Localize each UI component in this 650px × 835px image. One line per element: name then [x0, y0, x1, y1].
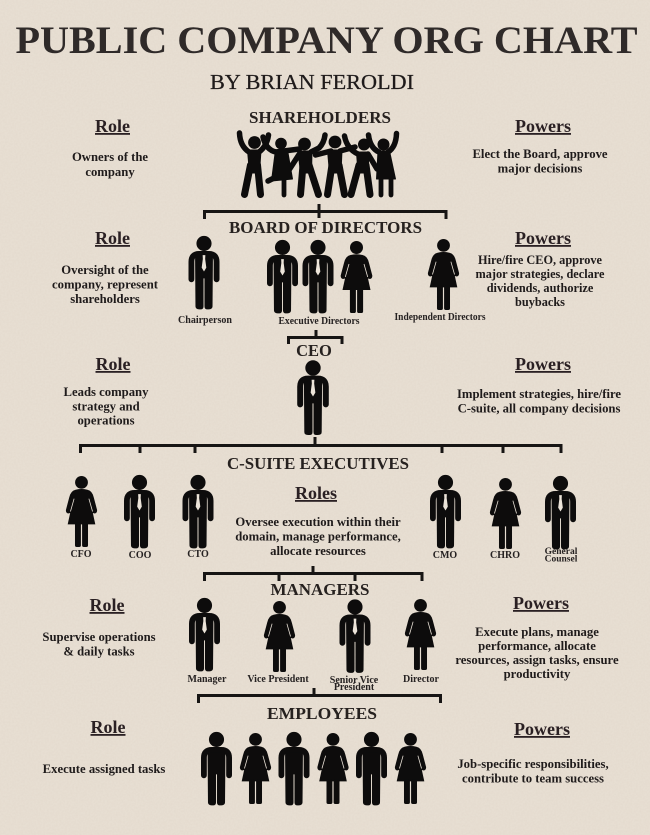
- label: chairperson: Chairperson: [178, 315, 232, 326]
- right powers description: Hire/fire CEO, approve: [478, 253, 602, 267]
- icon: employee: [395, 733, 426, 804]
- right powers description: resources, assign tasks, ensure: [455, 653, 619, 667]
- roles description: Oversee execution within their: [235, 515, 401, 529]
- connector: shareholders to board: [204, 204, 446, 219]
- connector: CEO to C-suite: [80, 437, 561, 453]
- label: General Counsel: General: [545, 547, 577, 557]
- left role description: operations: [77, 414, 135, 428]
- left role description: Oversight of the: [61, 263, 149, 277]
- right powers description: productivity: [504, 667, 571, 681]
- right powers label: Powers: [515, 354, 571, 374]
- label: director: Director: [403, 674, 440, 685]
- right powers description: buybacks: [515, 295, 565, 309]
- icon: CEO figure: [300, 360, 326, 435]
- label: COO: COO: [129, 550, 152, 561]
- right powers label: Powers: [515, 228, 571, 248]
- icon: employee: [281, 732, 307, 805]
- roles label: Roles: [295, 483, 337, 503]
- right powers description: C-suite, all company decisions: [458, 402, 620, 416]
- icon: CFO: [66, 476, 97, 547]
- label: vice president: Vice President: [247, 674, 309, 685]
- right powers description: contribute to team success: [462, 772, 604, 786]
- panel: C-suite executives: [66, 454, 578, 564]
- label: senior vice president: President: [334, 682, 375, 693]
- panel: managers: [42, 580, 619, 693]
- right powers description: Execute plans, manage: [475, 625, 599, 639]
- icon: employee: [359, 732, 384, 805]
- panel: board of directors: [52, 218, 605, 327]
- icon: CTO: [185, 475, 211, 548]
- icon: employee: [317, 733, 349, 804]
- label: independent directors: Independent Directors: [394, 312, 486, 323]
- left role description: shareholders: [70, 292, 140, 306]
- label: manager: Manager: [188, 674, 227, 685]
- heading: board of directors: BOARD OF DIRECTORS: [229, 218, 422, 237]
- right powers label: Powers: [515, 116, 571, 136]
- icon: CHRO: [490, 478, 521, 549]
- panel: employees: [43, 704, 609, 805]
- right powers label: Powers: [513, 593, 569, 613]
- roles description: allocate resources: [270, 544, 366, 558]
- subtitle: byline: BY BRIAN FEROLDI: [210, 70, 414, 94]
- icon: vice president: [264, 601, 295, 672]
- connector: board to CEO: [288, 330, 342, 344]
- icon: independent director, woman: [428, 239, 459, 310]
- left role label: Role: [96, 354, 130, 374]
- left role label: Role: [90, 595, 124, 615]
- heading: employees: EMPLOYEES: [267, 704, 377, 723]
- icon: executive director: [270, 240, 295, 313]
- heading: CEO: CEO: [296, 341, 332, 360]
- left role label: Role: [95, 228, 130, 248]
- right powers description: Implement strategies, hire/fire: [457, 387, 621, 401]
- right powers description: Job-specific responsibilities,: [457, 757, 609, 771]
- label: executive directors: Executive Directors: [278, 316, 360, 327]
- icon: COO: [127, 475, 152, 548]
- right powers description: performance, allocate: [478, 639, 596, 653]
- left role description: Execute assigned tasks: [43, 762, 165, 776]
- label: General Counsel: Counsel: [545, 554, 578, 564]
- right powers description: dividends, authorize: [487, 281, 594, 295]
- left role description: company: [85, 165, 135, 179]
- icon: General Counsel: [548, 476, 573, 549]
- connector: C-suite to managers: [204, 566, 422, 581]
- icon: director: [405, 599, 436, 670]
- icon: senior vice president: [342, 599, 368, 673]
- panel: shareholders: [72, 108, 608, 195]
- connector: managers to employees: [198, 688, 440, 703]
- icon: executive director: [305, 240, 331, 313]
- left role description: Owners of the: [72, 150, 148, 164]
- label: CFO: CFO: [70, 549, 92, 560]
- panel: CEO: [64, 341, 621, 435]
- label: CMO: CMO: [433, 550, 457, 561]
- left role description: Supervise operations: [42, 630, 156, 644]
- left role description: & daily tasks: [63, 644, 135, 658]
- heading: C-suite executives: C-SUITE EXECUTIVES: [227, 454, 409, 473]
- icon: manager: [192, 598, 217, 671]
- label: CTO: CTO: [187, 549, 209, 560]
- icon: chairperson: [191, 236, 217, 309]
- icon: employee: [204, 732, 229, 805]
- roles description: domain, manage performance,: [235, 530, 401, 544]
- label: CHRO: CHRO: [490, 550, 520, 561]
- right powers description: Elect the Board, approve: [472, 147, 608, 161]
- right powers label: Powers: [514, 719, 570, 739]
- icon: executive director, woman: [341, 241, 372, 313]
- icon: cheering crowd of shareholders: [240, 133, 396, 195]
- title: PUBLIC COMPANY ORG CHART: [16, 18, 638, 62]
- icon: CMO: [433, 475, 458, 548]
- heading: managers: MANAGERS: [270, 580, 370, 599]
- left role description: Leads company: [64, 385, 148, 399]
- heading: shareholders: SHAREHOLDERS: [249, 108, 391, 127]
- left role description: company, represent: [52, 278, 159, 292]
- right powers description: major strategies, declare: [476, 267, 605, 281]
- left role label: Role: [95, 116, 130, 136]
- left role label: Role: [90, 717, 126, 737]
- label: senior vice president: Senior Vice: [330, 675, 378, 686]
- left role description: strategy and: [72, 399, 140, 413]
- icon: employee: [240, 733, 271, 804]
- right powers description: major decisions: [498, 162, 582, 176]
